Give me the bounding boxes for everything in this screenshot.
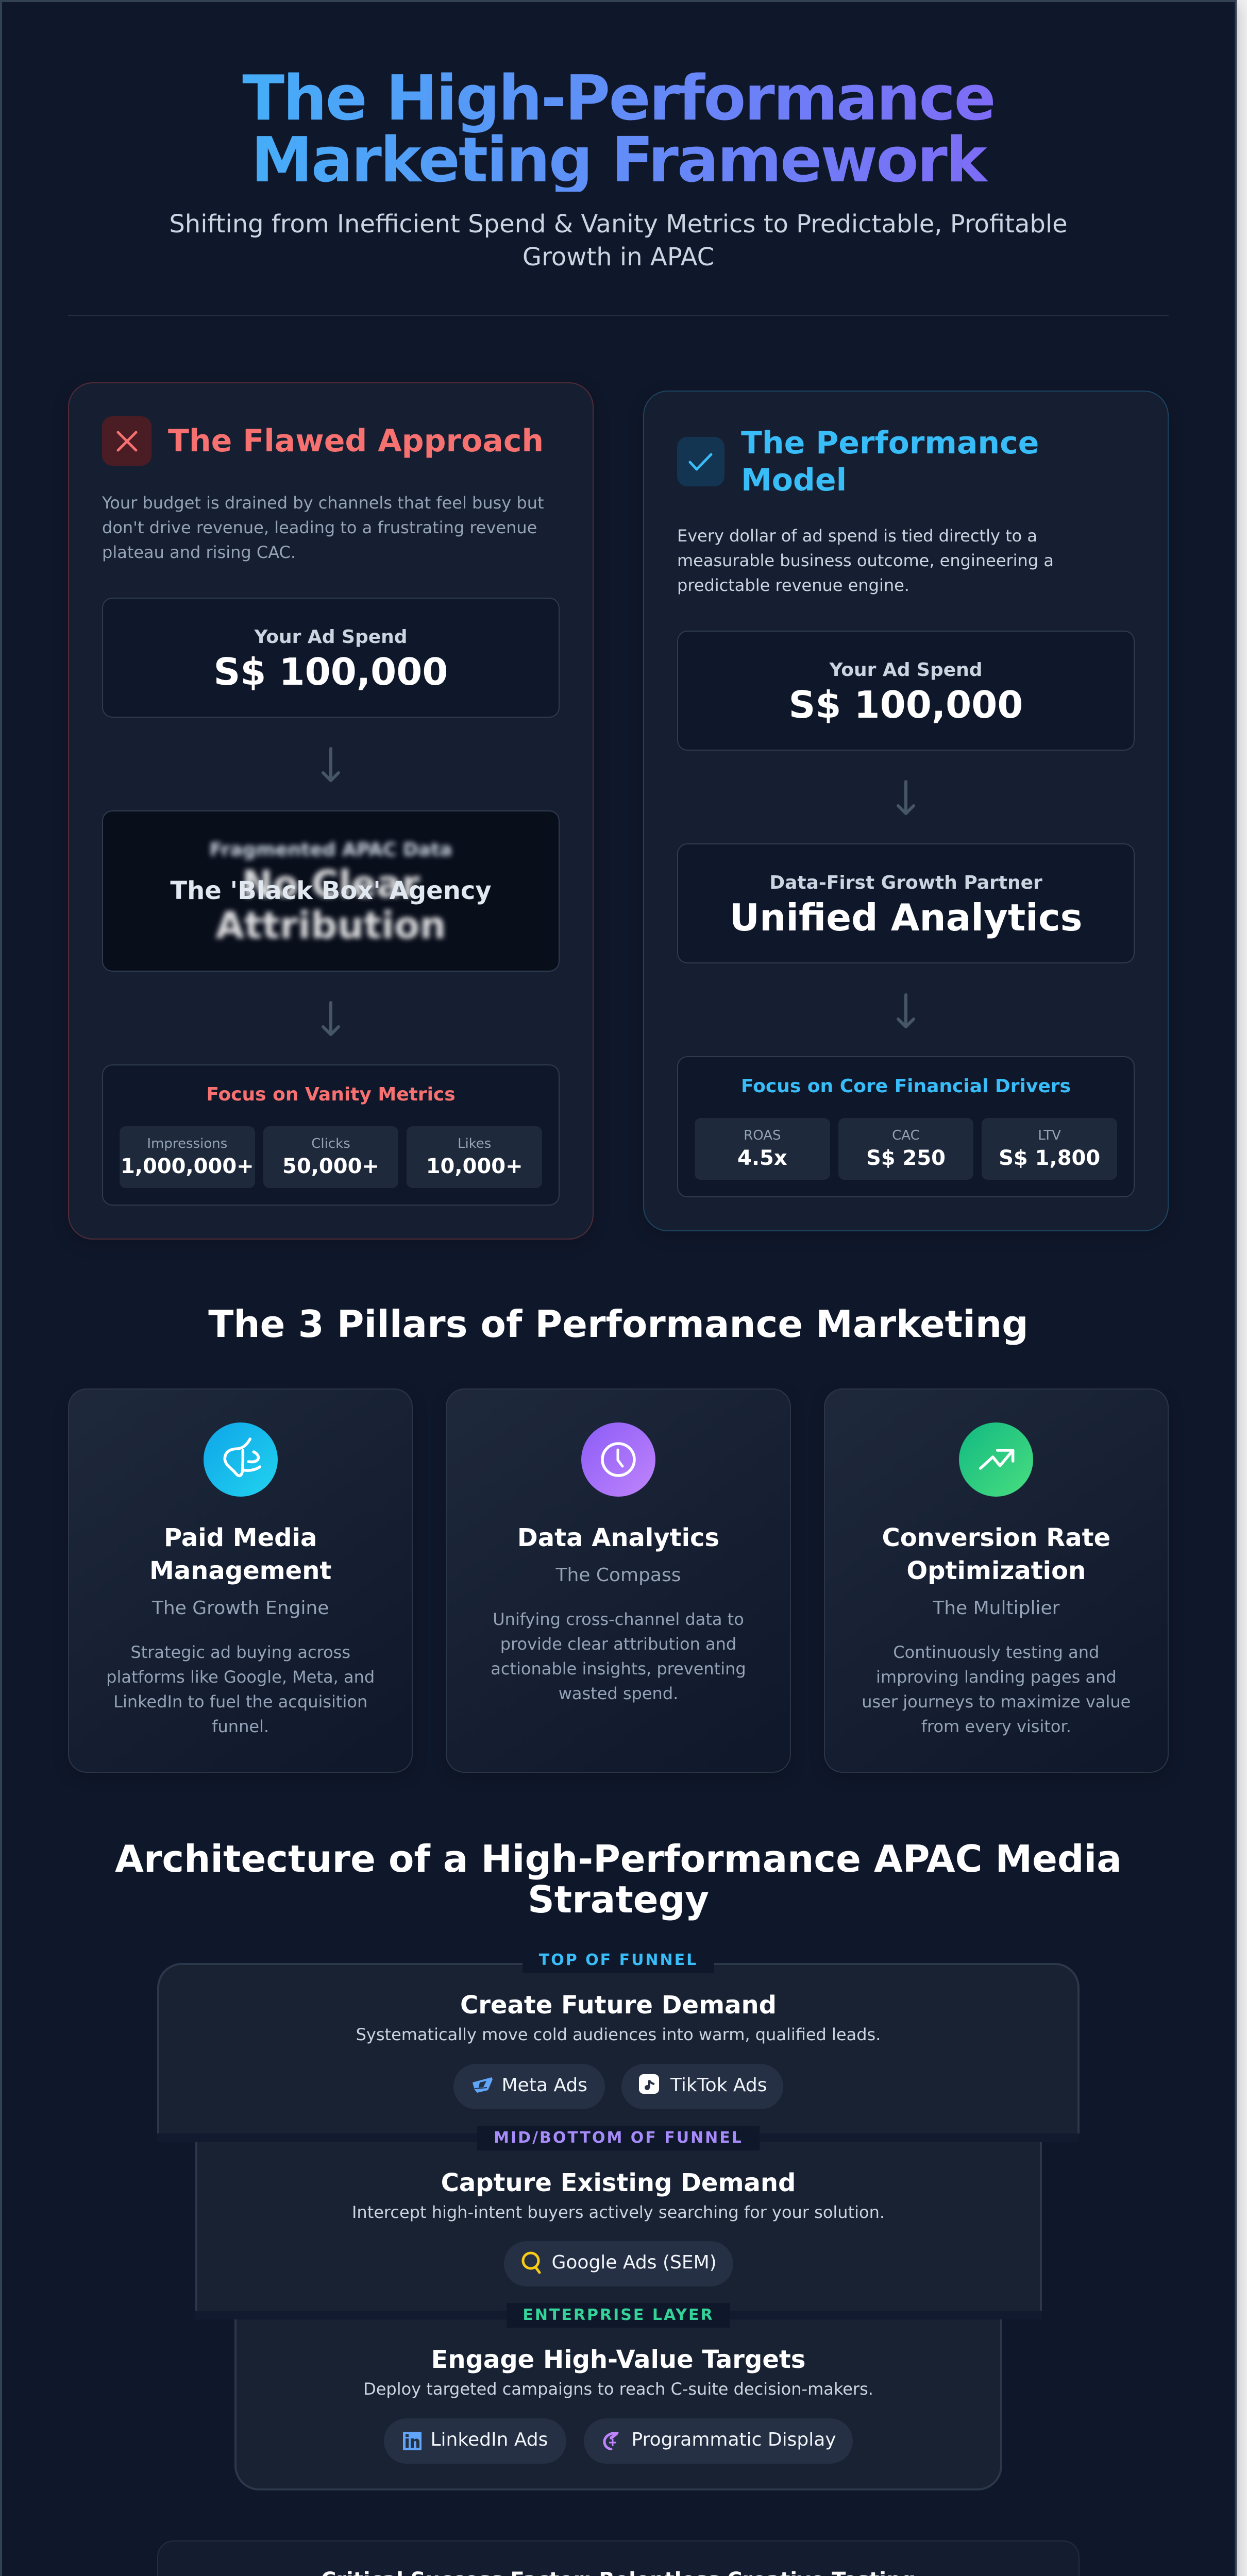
icon: linkedin [403,2432,422,2450]
value: Unified Analytics [729,896,1083,939]
arrow [897,780,915,815]
layer: mid/bottom of funnel [195,2142,1042,2311]
description: Intercept high-intent buyers actively searching for your solution. [352,2202,885,2222]
metric: likes: 10,000+ [426,1155,523,1178]
metric: cac [838,1118,973,1180]
description: don't drive revenue, leading to a frustrating revenue [102,518,537,537]
arrow [322,747,340,782]
icon: search [521,2251,541,2274]
box: core financial drivers [677,1056,1135,1197]
heading: the flawed approach: The Flawed Approach [168,423,544,459]
heading: Capture Existing Demand [441,2168,796,2197]
metric: roas: 4.5x [737,1146,787,1170]
metric: cac: S$ 250 [866,1146,946,1170]
callout: critical success factor [157,2540,1080,2576]
panel: conversion rate optimization [824,1388,1169,1773]
metric: likes [407,1126,542,1188]
label: Meta Ads [502,2074,587,2096]
description [491,1609,746,1703]
overlay label: The 'Black Box' Agency [170,876,492,905]
panel: data analytics [446,1388,791,1773]
metric: roas [695,1118,830,1180]
label: Google Ads (SEM) [551,2251,717,2273]
label: Your Ad Spend [829,659,983,681]
description: LinkedIn to fuel the acquisition [113,1692,367,1711]
metric: clicks: Clicks [311,1136,350,1151]
layer: top of funnel [157,1963,1080,2133]
icon: trend up [959,1422,1033,1497]
description: Deploy targeted campaigns to reach C-suite decision-makers. [363,2379,873,2399]
subheading: The Multiplier [933,1597,1059,1619]
metric: clicks: 50,000+ [282,1155,379,1178]
description: plateau and rising CAC. [102,543,296,562]
metric: impressions [120,1126,255,1188]
layer: enterprise layer [234,2319,1002,2490]
heading: Management [149,1556,331,1585]
icon: tiktok [639,2074,659,2094]
icon: x mark [102,416,151,466]
heading: the performance model: The Performance [741,425,1039,461]
icon: clock [581,1422,655,1497]
heading: Conversion Rate [882,1523,1110,1552]
description [106,1642,375,1736]
value: S$ 100,000 [214,650,448,693]
description: measurable business outcome, engineering a [677,551,1054,570]
description: Unifying cross-channel data to [493,1609,744,1629]
label: Programmatic Display [632,2429,836,2450]
subtitle: Growth in APAC [523,243,714,272]
heading: architecture [115,1837,1122,1921]
tag: enterprise layer: ENTERPRISE LAYER [523,2306,714,2324]
heading: Engage High-Value Targets [431,2345,805,2374]
pill: linkedin ads [384,2418,566,2464]
tag: top of funnel [523,1948,714,1973]
label: LinkedIn Ads [431,2429,548,2450]
heading: the performance model [741,425,1039,498]
blurred value [212,862,447,947]
arrow [897,993,915,1028]
heading: Focus on Core Financial Drivers [741,1076,1071,1097]
description: Every dollar of ad spend is tied directly to a [677,526,1037,546]
description: Systematically move cold audiences into warm, qualified leads. [356,2025,881,2044]
description: Strategic ad buying across [130,1642,350,1662]
description: improving landing pages and [876,1667,1117,1687]
heading: Focus on Vanity Metrics [206,1084,456,1105]
description [677,526,1054,595]
pill: tiktok ads [621,2064,783,2109]
heading: Create Future Demand [460,1991,777,2020]
heading: Data Analytics [517,1523,719,1552]
title [68,68,1169,192]
description: platforms like Google, Meta, and [106,1667,375,1687]
icon: check mark [677,437,724,486]
label: Data-First Growth Partner [769,872,1042,893]
description: predictable revenue engine. [677,575,909,595]
pill: programmatic display [584,2418,853,2464]
description: Continuously testing and [893,1642,1099,1662]
blurred value: No Clear [242,862,420,906]
tag: enterprise layer [507,2303,730,2328]
metric: roas: ROAS [744,1128,781,1143]
description: funnel. [212,1717,269,1736]
panel: the flawed approach [68,382,594,1240]
heading: the performance model: Model [741,462,847,498]
box: black box agency [102,810,560,972]
description: from every visitor. [921,1717,1071,1736]
funnel diagram [157,1951,1080,2490]
tag: mid/bottom of funnel [477,2126,760,2150]
subtitle: Shifting from Inefficient Spend & Vanity Metrics to Predictable, Profitable [169,210,1068,239]
icon: meta [473,2077,493,2093]
metric: impressions: 1,000,000+ [121,1155,254,1178]
panel: the performance model [643,391,1169,1231]
box: unified analytics [677,843,1135,963]
arrow [322,1001,340,1036]
heading: Paid Media [164,1523,317,1552]
description: actionable insights, preventing [491,1659,746,1679]
metric: ltv: S$ 1,800 [999,1146,1100,1170]
metric: likes: Likes [458,1136,491,1151]
metric: clicks [263,1126,398,1188]
description [102,493,544,562]
heading: architecture: Architecture of a High-Performance APAC Media [115,1837,1122,1880]
label: Your Ad Spend [254,626,408,648]
tag: mid/bottom of funnel: MID/BOTTOM OF FUNNEL [494,2129,743,2147]
heading: 3 pillars: The 3 Pillars of Performance Marketing [208,1302,1029,1346]
metric: impressions: Impressions [147,1136,227,1151]
value: S$ 100,000 [789,683,1023,726]
box: your ad spend [677,631,1135,751]
title: The High-Performance [242,63,995,134]
subheading: The Compass [555,1564,681,1586]
description: wasted spend. [559,1684,678,1703]
icon: megaphone [204,1422,278,1497]
icon: programmatic [603,2432,621,2450]
heading [882,1523,1110,1585]
subheading: The Growth Engine [152,1597,329,1619]
box: vanity metrics [102,1064,560,1206]
pill: google ads [504,2241,733,2286]
title: Marketing Framework [251,125,986,196]
heading [149,1523,331,1585]
metric: cac: CAC [892,1128,920,1143]
metric: ltv [982,1118,1117,1180]
description: user journeys to maximize value [862,1692,1131,1711]
heading: Optimization [906,1556,1086,1585]
blurred value: Attribution [215,904,446,947]
subtitle [169,210,1068,272]
heading: architecture: Strategy [528,1878,709,1921]
metric: ltv: LTV [1038,1128,1061,1143]
panel: paid media management [68,1388,413,1773]
description: Your budget is drained by channels that feel busy but [102,493,544,513]
box: your ad spend [102,598,560,718]
label: TikTok Ads [670,2074,767,2096]
blurred label: Fragmented APAC Data [209,839,452,860]
description: provide clear attribution and [500,1634,736,1654]
description [862,1642,1131,1736]
pill: meta ads [453,2064,605,2109]
tag: top of funnel: TOP OF FUNNEL [539,1951,698,1969]
